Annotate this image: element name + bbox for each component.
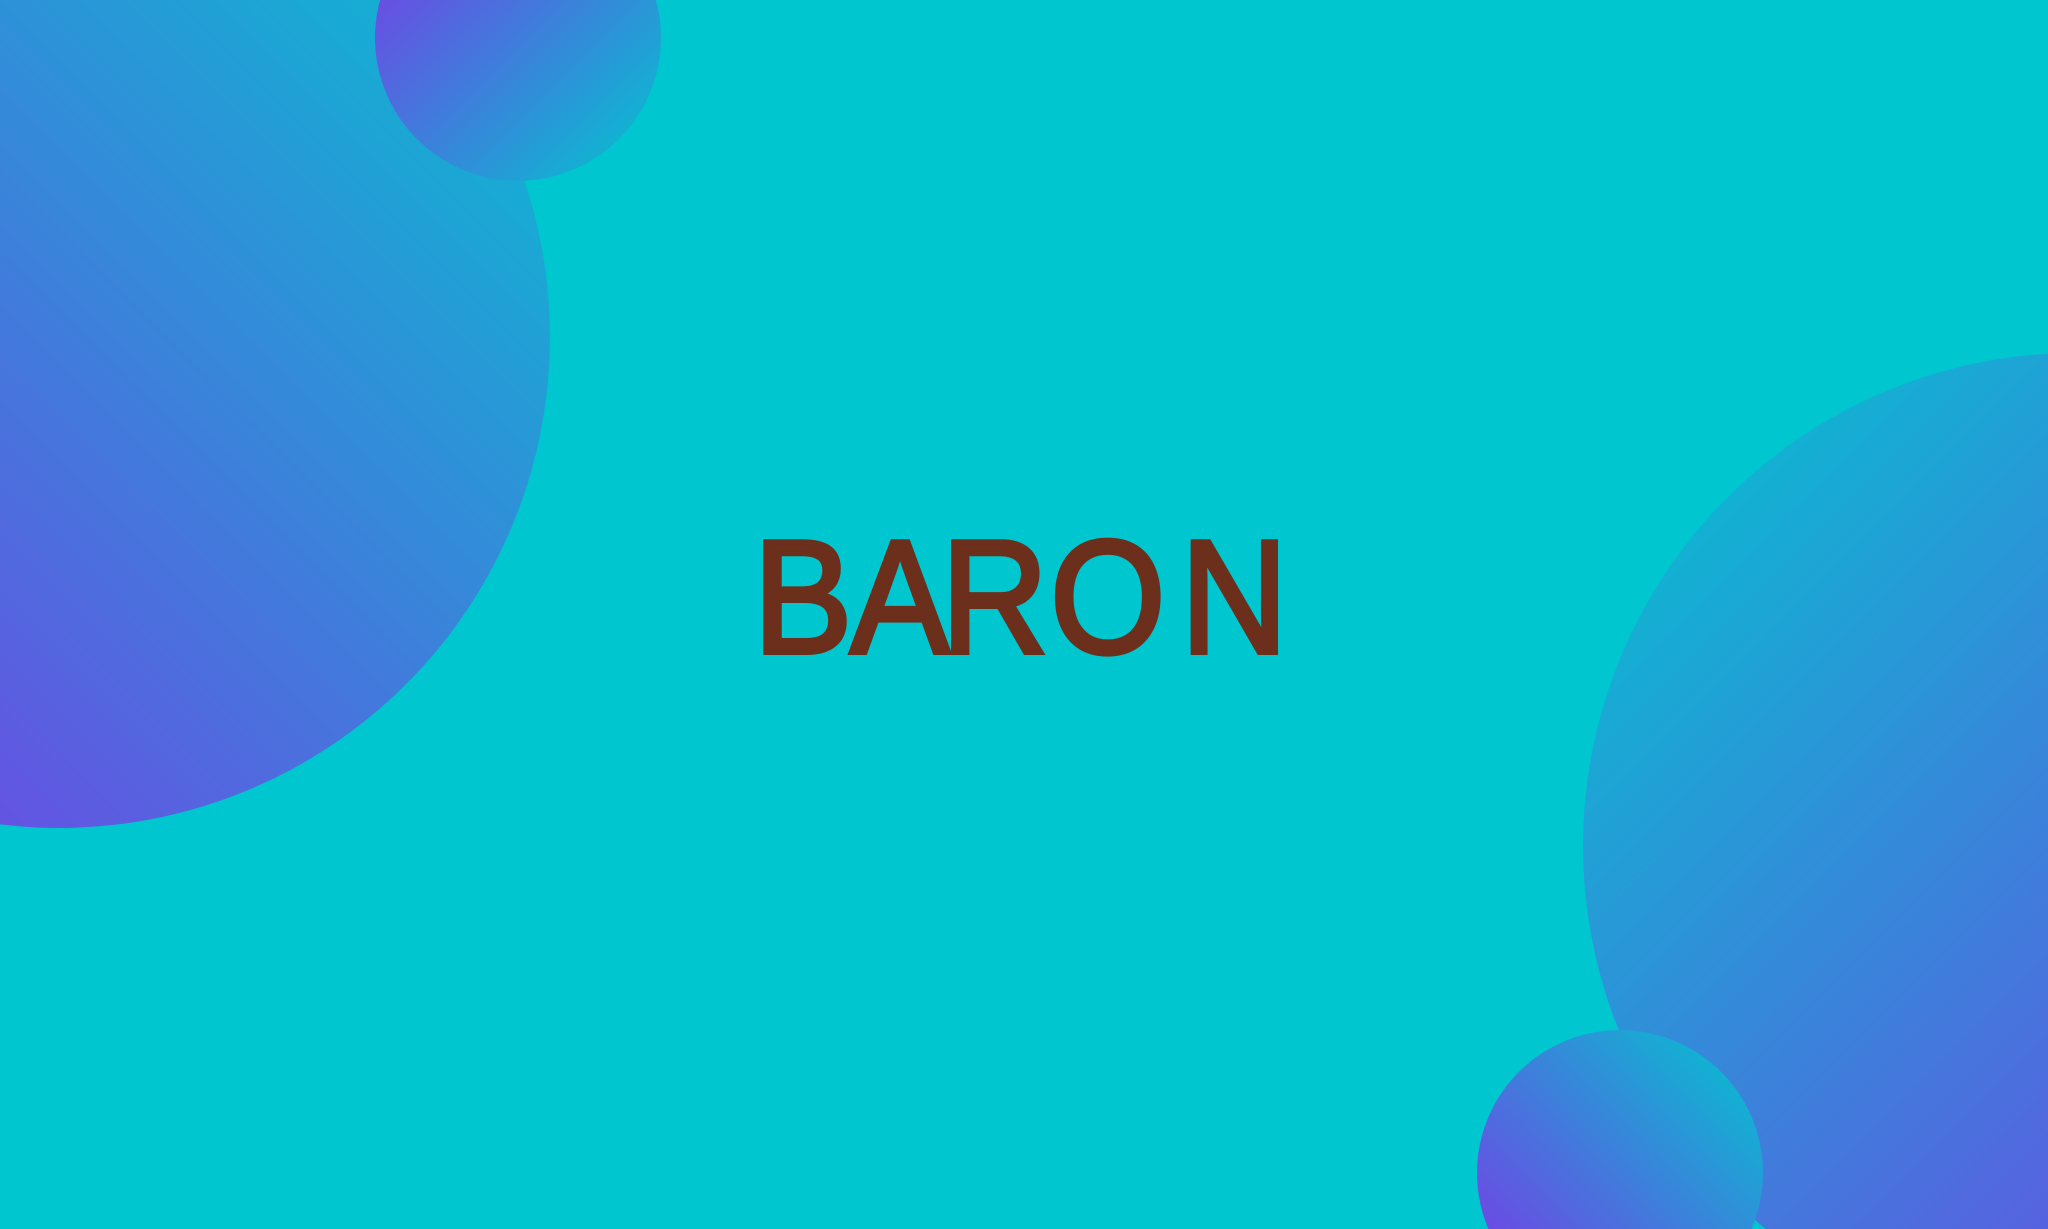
- circle: large right gradient: [1583, 354, 2048, 1229]
- title: BARON: BARON: [753, 507, 1288, 687]
- circle: large top-left gradient: [0, 0, 550, 828]
- circle: small top gradient: [375, 0, 661, 181]
- circle: small bottom gradient: [1477, 1030, 1763, 1229]
